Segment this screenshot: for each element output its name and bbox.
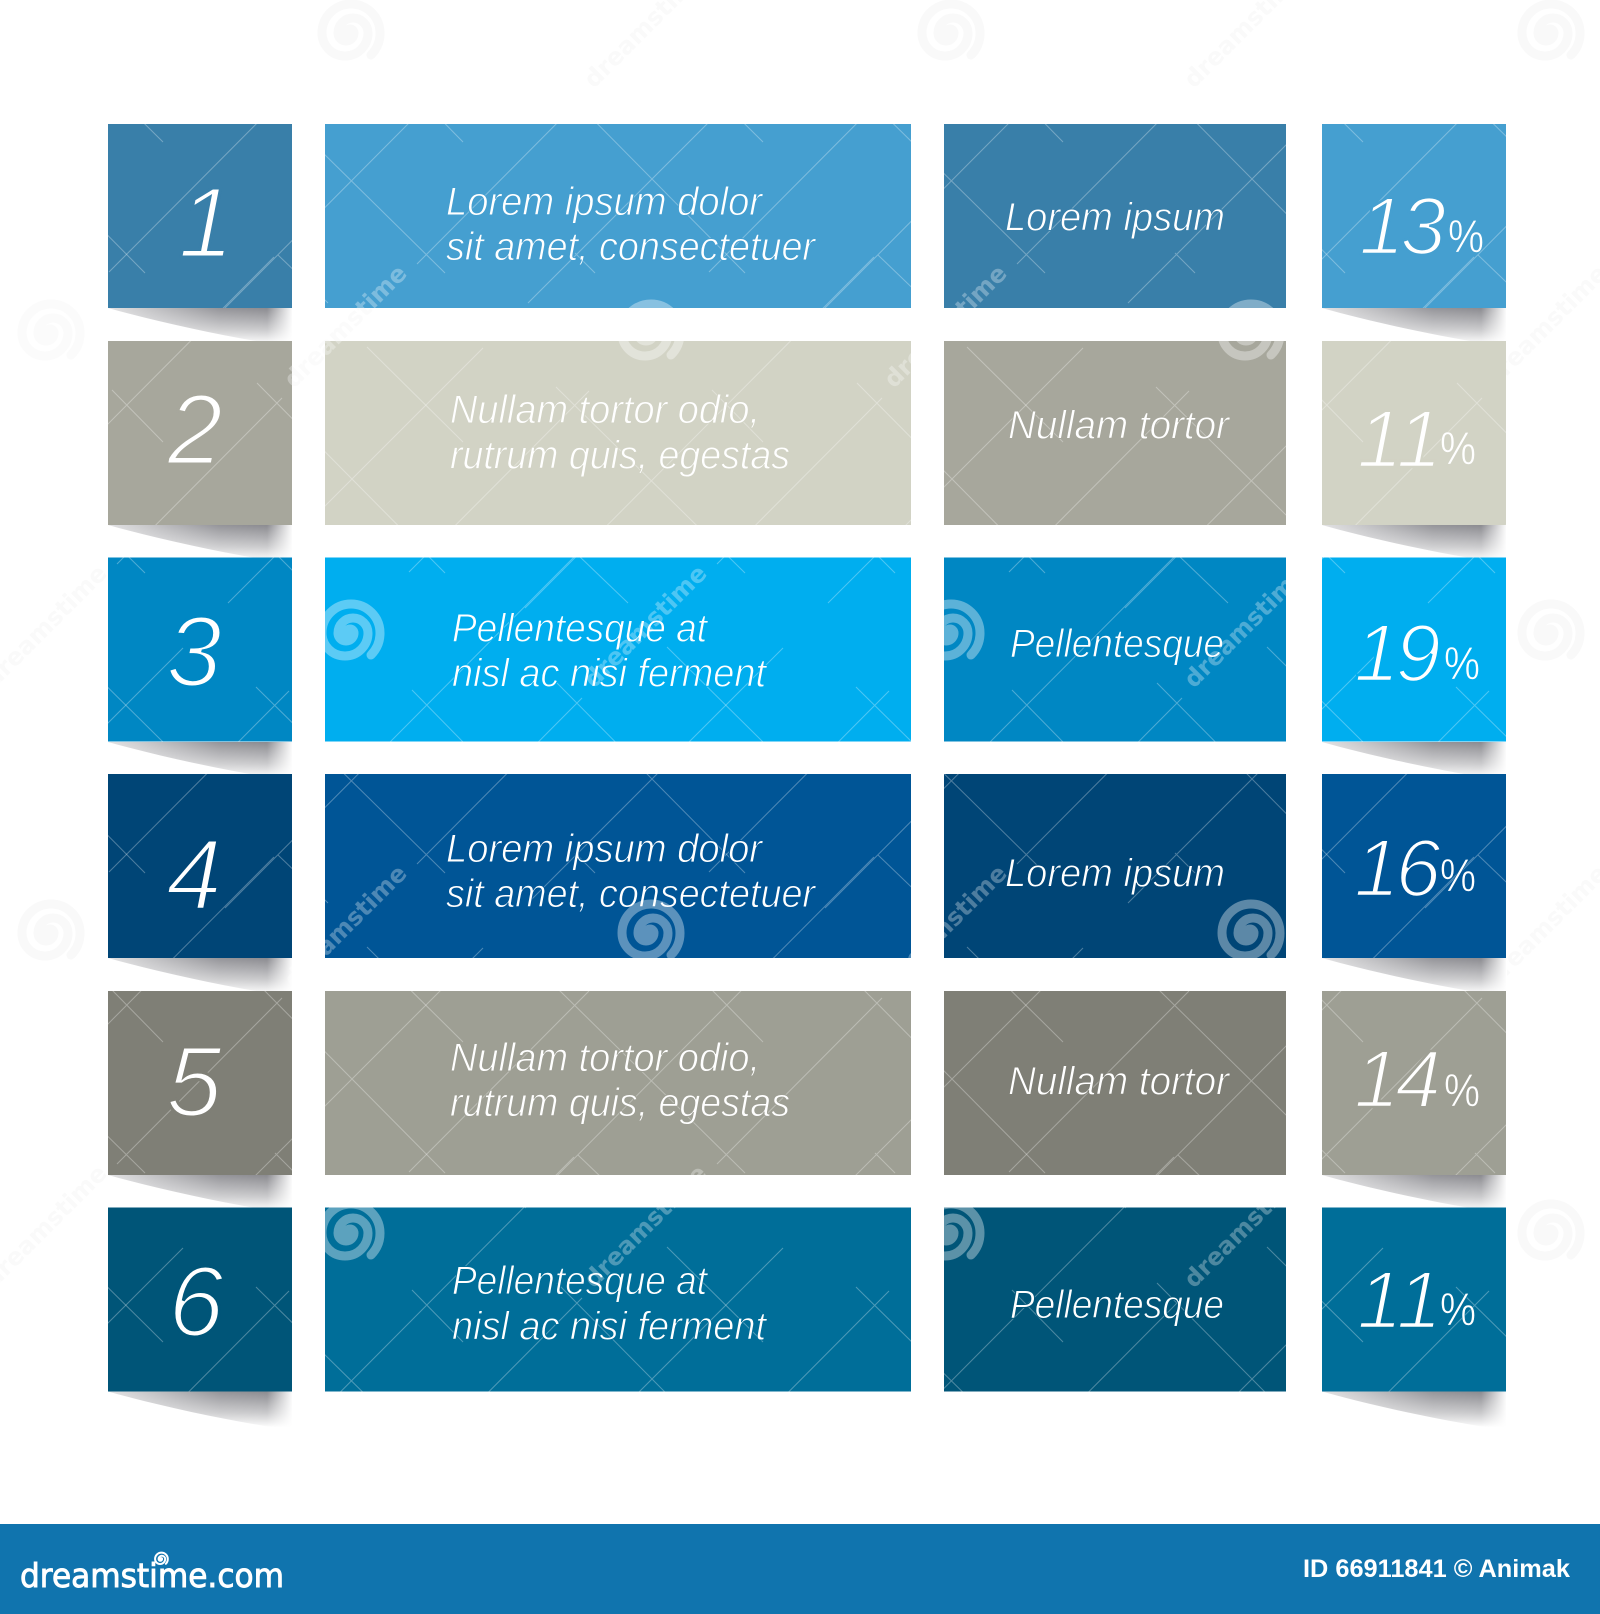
number tile 2	[108, 341, 292, 525]
watermark spirals and wordmarks over panels: dreamstime	[578, 1159, 712, 1293]
description panel 6: nisl ac nisi ferment	[452, 1304, 768, 1348]
label panel 1: Lorem ipsum	[1005, 196, 1225, 240]
watermark spirals and wordmarks over panels: dreamstime	[578, 559, 712, 693]
description panel 3: nisl ac nisi ferment	[452, 652, 768, 696]
label panel 6: Pellentesque	[1010, 1283, 1224, 1327]
number tile 3	[108, 558, 292, 742]
watermark spirals and wordmarks over panels: dreamstime	[1178, 559, 1312, 693]
percent tile 16%: 16	[1354, 823, 1441, 914]
watermark spirals and wordmarks over panels: dreamstime	[878, 859, 1012, 993]
percent tile 11% (row 2): 11	[1357, 394, 1442, 485]
watermark spirals and wordmarks over panels: dreamstime	[278, 859, 412, 993]
description panel 5	[325, 991, 911, 1175]
row 3	[108, 558, 1506, 742]
footer bar	[0, 1524, 1600, 1614]
description panel 2: Nullam tortor odio,	[450, 388, 760, 432]
description panel 2	[325, 341, 911, 525]
percent tile 11% (row 2): %	[1440, 422, 1476, 474]
percent tile 14%: 14	[1354, 1034, 1441, 1125]
label panel 4: Lorem ipsum	[1005, 852, 1225, 896]
label panel 4	[944, 774, 1286, 958]
description panel 4: sit amet, consectetuer	[446, 872, 817, 916]
percent tile 13%	[1322, 124, 1506, 308]
label panel 5: Nullam tortor	[1008, 1060, 1231, 1104]
label panel 3: Pellentesque	[1010, 622, 1224, 666]
description panel 6: Pellentesque at	[452, 1259, 709, 1303]
percent tile 19%: 19	[1354, 608, 1441, 699]
description panel 4	[325, 774, 911, 958]
row 1	[108, 124, 1506, 308]
number tile 3: 3	[166, 596, 222, 708]
number tile 4	[108, 774, 292, 958]
description panel 5: Nullam tortor odio,	[450, 1036, 760, 1080]
number tile 4: 4	[166, 819, 222, 931]
row 2	[108, 341, 1506, 525]
description panel 3	[325, 558, 911, 742]
description panel 5: rutrum quis, egestas	[450, 1081, 790, 1125]
percent tile 14%	[1322, 991, 1506, 1175]
label panel 1	[944, 124, 1286, 308]
percent tile 13%: %	[1448, 210, 1484, 262]
percent tile 19%: %	[1444, 637, 1480, 689]
description panel 2: rutrum quis, egestas	[450, 434, 790, 478]
percent tile 19%	[1322, 558, 1506, 742]
percent tile 11% (row 6): %	[1440, 1283, 1476, 1335]
image id and credit: ID 66911841 © Animak	[1303, 1555, 1570, 1583]
watermark spirals and wordmarks over panels: dreamstime	[278, 259, 412, 393]
page shadows under number and percent tiles	[108, 308, 1507, 1430]
description panel 1: sit amet, consectetuer	[446, 225, 817, 269]
percent tile 16%: %	[1440, 849, 1476, 901]
description panel 1	[325, 124, 911, 308]
label panel 5	[944, 991, 1286, 1175]
label panel 3	[944, 558, 1286, 742]
percent tile 11% (row 6): 11	[1357, 1255, 1442, 1346]
number tile 1: 1	[178, 167, 234, 279]
watermark spirals and wordmarks over panels: dreamstime	[878, 259, 1012, 393]
number tile 6: 6	[168, 1246, 224, 1358]
description panel 4: Lorem ipsum dolor	[446, 827, 764, 871]
row 6	[108, 1208, 1506, 1392]
number tile 1	[108, 124, 292, 308]
faint watermark on white background: dreamstime	[278, 259, 412, 393]
description panel 3: Pellentesque at	[452, 606, 709, 650]
number tile 2: 2	[166, 374, 223, 486]
label panel 6	[944, 1208, 1286, 1392]
label panel 2	[944, 341, 1286, 525]
footer logo wordmark: dreamstime.com	[20, 1556, 284, 1595]
number tile 6	[108, 1208, 292, 1392]
label panel 2: Nullam tortor	[1008, 404, 1231, 448]
percent tile 13%: 13	[1359, 181, 1446, 272]
number tile 5: 5	[166, 1026, 222, 1138]
watermark spirals and wordmarks over panels	[22, 259, 1312, 1293]
number tile 5	[108, 991, 292, 1175]
description panel 1: Lorem ipsum dolor	[446, 180, 764, 224]
percent tile 14%: %	[1444, 1064, 1480, 1116]
row 5	[108, 991, 1506, 1175]
percent tile 16%	[1322, 774, 1506, 958]
row 4	[108, 774, 1506, 958]
percent tile 11% (row 2)	[1322, 341, 1506, 525]
watermark spirals and wordmarks over panels: dreamstime	[1178, 1159, 1312, 1293]
icon: logo spiral	[155, 1553, 168, 1564]
description panel 6	[325, 1208, 911, 1392]
percent tile 11% (row 6)	[1322, 1208, 1506, 1392]
